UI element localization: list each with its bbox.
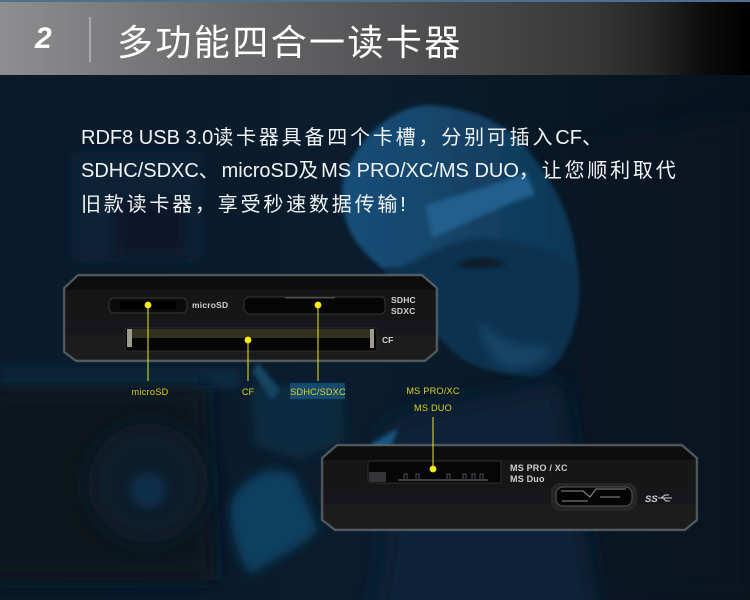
callout: MS PRO/XC MS DUO: MS PRO/XC <box>406 386 460 396</box>
card reader front view <box>64 275 437 361</box>
slot: SDHC/SDXC <box>244 297 385 314</box>
printed label: SDHC SDXC: SDXC <box>391 306 415 316</box>
title: 多功能四合一读卡器 <box>117 22 463 63</box>
callout: SDHC/SDXC <box>290 302 346 397</box>
printed label: CF: CF <box>382 335 393 345</box>
callout: MS PRO/XC MS DUO: MS DUO <box>414 403 452 413</box>
intro text block: RDF8 USB 3.0读卡器具备四个卡槽，分别可插入CF、 <box>81 127 605 149</box>
intro text block: 旧款读卡器，享受秒速数据传输! <box>81 194 406 216</box>
callout: CF <box>242 337 255 397</box>
SuperSpeed USB logo: SS <box>645 494 658 505</box>
section number: 2 <box>35 22 52 55</box>
callout: SDHC/SDXC: SDHC/SDXC <box>290 387 346 397</box>
callout: microSD <box>132 302 169 397</box>
printed label: MS PRO / XC, MS Duo: MS PRO / XC <box>510 463 568 473</box>
printed label: SDHC SDXC: SDHC <box>391 295 416 305</box>
printed label: MS PRO / XC, MS Duo: MS Duo <box>510 474 545 484</box>
printed label: microSD: microSD <box>192 300 228 310</box>
callout: MS PRO/XC MS DUO <box>406 386 460 472</box>
slot: CF <box>125 328 377 351</box>
header bar <box>0 0 750 75</box>
intro text block: SDHC/SDXC、microSD及MS PRO/XC/MS DUO，让您顺利取代 <box>81 160 678 182</box>
card reader rear/side view <box>322 445 697 530</box>
intro text block <box>81 127 678 216</box>
slot: MS PRO <box>368 461 501 483</box>
SuperSpeed USB logo <box>645 494 672 505</box>
callout: CF: CF <box>242 387 255 397</box>
callout: microSD: microSD <box>132 387 169 397</box>
header divider <box>89 17 91 62</box>
USB 3.0 micro-B port <box>551 483 637 511</box>
slot: microSD <box>109 298 187 313</box>
